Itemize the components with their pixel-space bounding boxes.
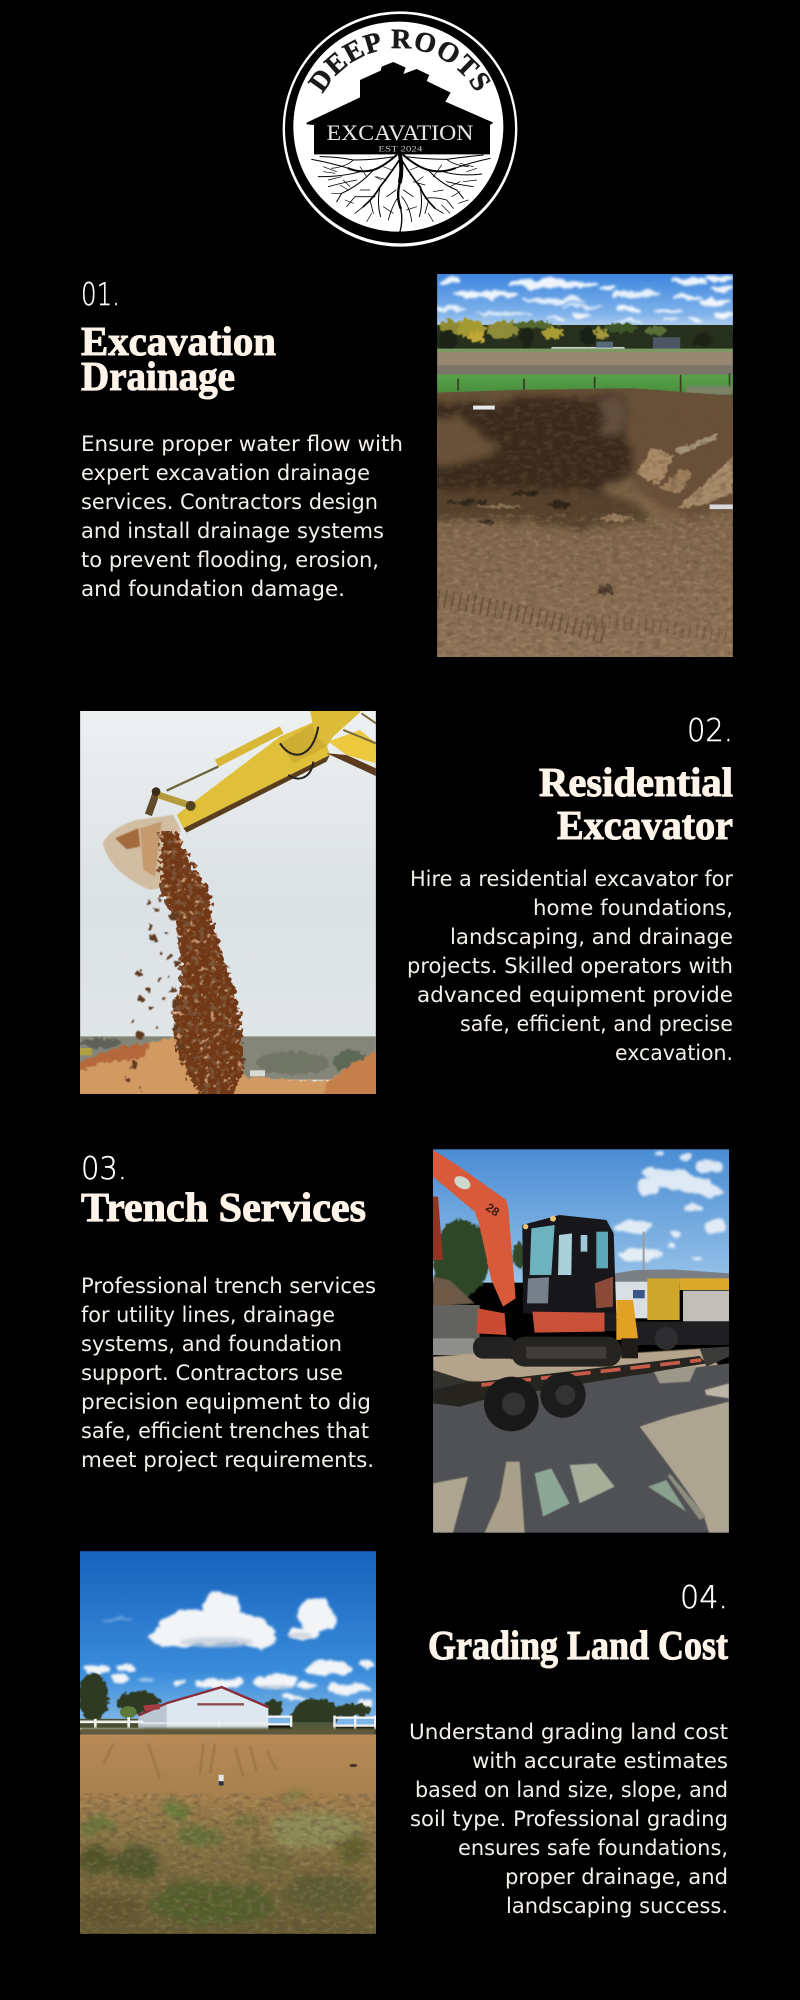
photo detail: white fence xyxy=(80,1716,376,1736)
photo detail: falling soil stream xyxy=(126,832,245,1098)
panel: 01 Excavation Drainage xyxy=(81,274,733,657)
panel: 02 Residential Excavator xyxy=(80,711,733,1094)
logo: root system xyxy=(312,154,490,232)
logo: barn silhouette xyxy=(307,62,493,154)
body text: drainage description xyxy=(81,432,403,601)
body text: residential excavator description: landscaping, and drainage xyxy=(450,925,733,949)
logo: EXCAVATION wordmark: EXCAVATION xyxy=(327,120,473,145)
heading: Excavation Drainage: Drainage xyxy=(81,353,235,399)
photo detail: excavator: 28 xyxy=(483,1200,502,1220)
body text: residential excavator description: projects. Skilled operators with xyxy=(407,954,733,978)
heading: Residential Excavator xyxy=(539,765,733,848)
logo: Deep Roots Excavation badge xyxy=(282,11,518,247)
body text: grading land cost description: with accurate estimates xyxy=(472,1749,728,1773)
photo detail: excavator arm xyxy=(148,711,376,833)
body text: grading land cost description xyxy=(409,1720,728,1918)
heading: Residential Excavator: Excavator xyxy=(557,802,733,848)
body text: drainage description: to prevent flooding, erosion, xyxy=(81,548,379,572)
body text: grading land cost description: Understand grading land cost xyxy=(409,1720,728,1744)
logo: DEEP ROOTS arched text: DEEP ROOTS xyxy=(307,29,491,94)
photo detail: dirt slope and grass xyxy=(77,1744,376,1934)
body text: trench services description: for utility lines, drainage xyxy=(81,1303,335,1327)
body text: trench services description: precision equipment to dig xyxy=(81,1390,371,1414)
photo: orange mini excavator on a flatbed trailer xyxy=(433,1149,729,1533)
body text: grading land cost description: soil type. Professional grading xyxy=(410,1807,728,1831)
photo detail: sunlit pavement and shadow xyxy=(433,1367,729,1533)
photo: excavated drainage pit in a field xyxy=(437,274,733,657)
body text: trench services description: safe, efficient trenches that xyxy=(81,1419,369,1443)
body text: grading land cost description: based on land size, slope, and xyxy=(415,1778,728,1802)
body text: trench services description: meet project requirements. xyxy=(81,1448,374,1472)
photo detail: bucket xyxy=(103,815,180,890)
body text: drainage description: Ensure proper water flow with xyxy=(81,432,403,456)
body text: drainage description: and foundation damage. xyxy=(81,577,345,601)
photo detail: white barn xyxy=(138,1687,268,1732)
body text: residential excavator description: advanced equipment provide xyxy=(417,983,733,1007)
body text: trench services description xyxy=(81,1274,376,1472)
body text: residential excavator description xyxy=(407,867,733,1065)
body text: residential excavator description: home foundations, xyxy=(533,896,733,920)
body text: grading land cost description: landscaping success. xyxy=(506,1894,728,1918)
logo: established date: EST 2024 xyxy=(378,145,422,154)
body text: grading land cost description: proper drainage, and xyxy=(505,1865,728,1889)
photo detail: soil and pit walls xyxy=(430,388,736,657)
photo detail: flatbed trailer and wheels xyxy=(433,1347,729,1431)
photo: graded field in front of a white barn xyxy=(80,1551,376,1934)
body text: trench services description: systems, and foundation xyxy=(81,1332,342,1356)
body text: residential excavator description: excavation. xyxy=(615,1041,733,1065)
body text: trench services description: support. Contractors use xyxy=(81,1361,343,1385)
panel: 04 Grading Land Cost xyxy=(80,1551,728,1934)
body text: drainage description: services. Contractors design xyxy=(81,490,378,514)
body text: trench services description: Professional trench services xyxy=(81,1274,376,1298)
logo: outer white disc and black ring xyxy=(283,11,517,247)
body text: residential excavator description: safe, efficient, and precise xyxy=(460,1012,733,1036)
body text: residential excavator description: Hire a residential excavator for xyxy=(410,867,733,891)
photo: yellow excavator bucket dumping soil xyxy=(80,711,376,1094)
panel: 03 Trench Services xyxy=(81,1149,729,1533)
heading: Excavation Drainage xyxy=(81,322,276,400)
body text: drainage description: expert excavation drainage xyxy=(81,461,370,485)
body text: grading land cost description: ensures safe foundations, xyxy=(458,1836,728,1860)
photo detail: excavator xyxy=(433,1150,638,1367)
body text: drainage description: and install drainage systems xyxy=(81,519,384,543)
